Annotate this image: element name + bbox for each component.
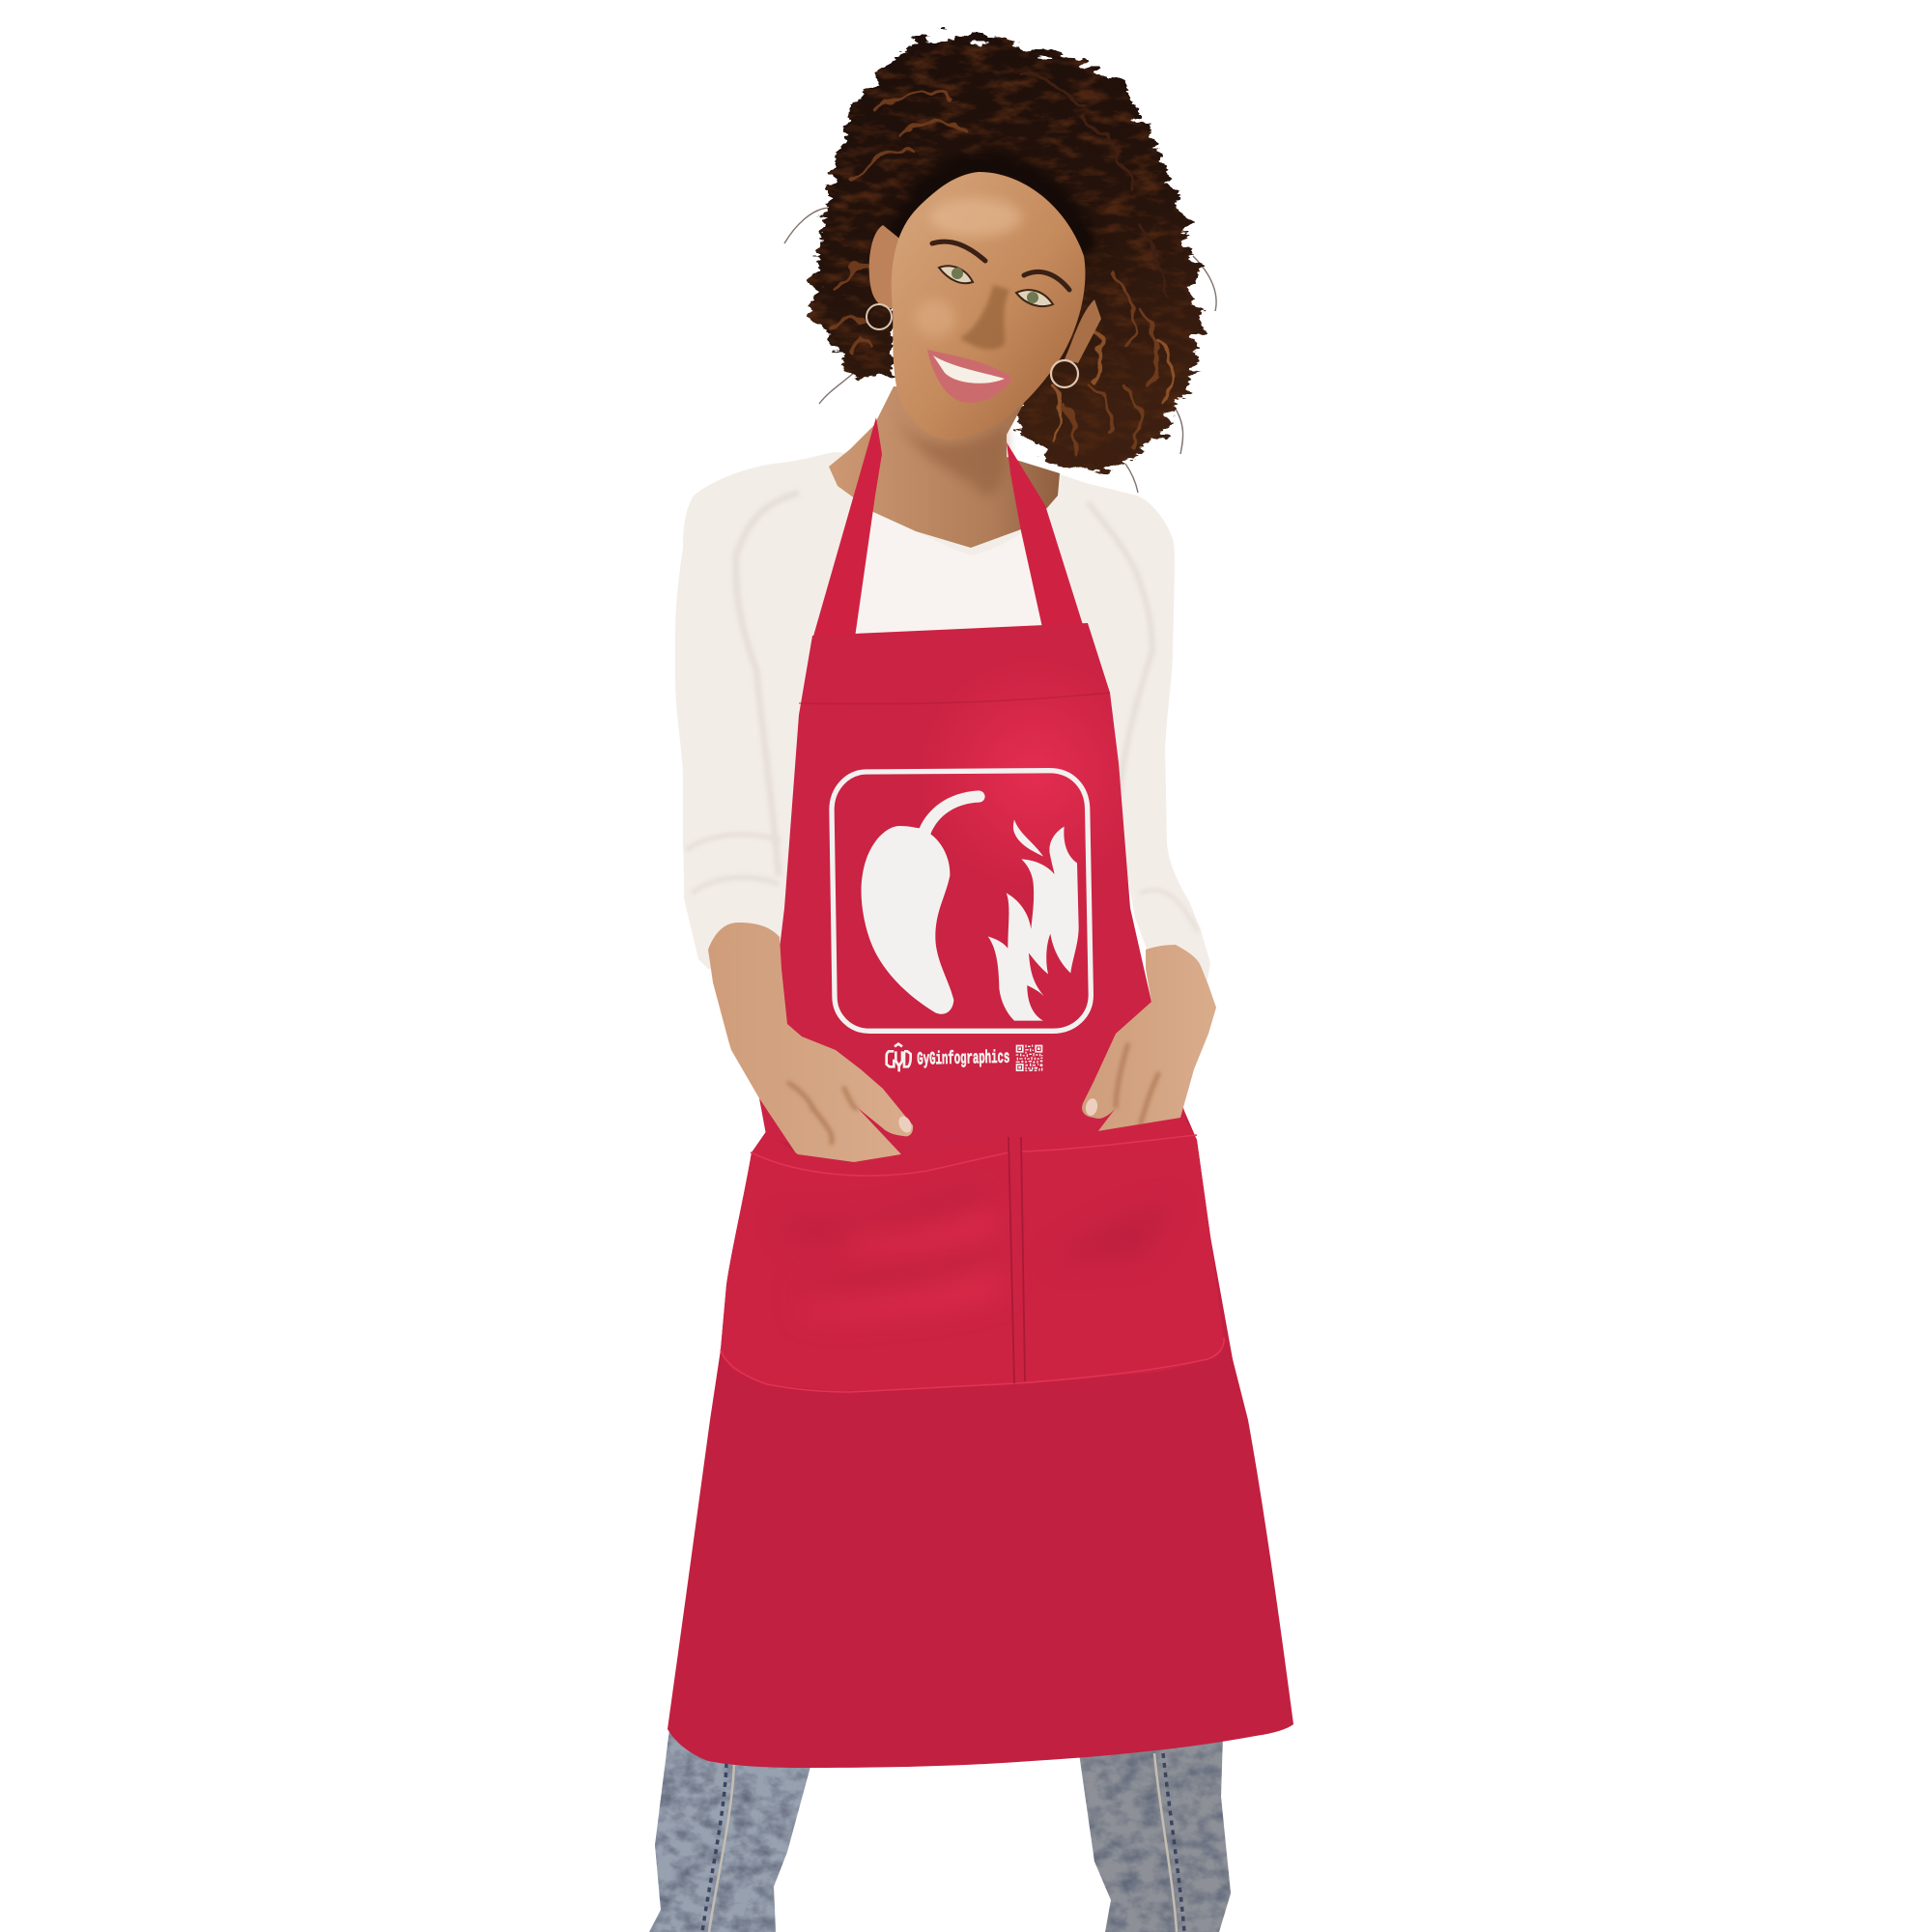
right jeans leg [1079, 1734, 1231, 1932]
right earring [1051, 360, 1078, 387]
nose [960, 285, 1009, 350]
chili pepper [862, 790, 985, 1014]
right thumb nail [1085, 1097, 1098, 1117]
pocket folds [781, 1183, 1174, 1316]
jeans [649, 1729, 1231, 1932]
neck shadow [894, 415, 1006, 497]
QR code [1016, 1045, 1042, 1071]
neck and chest [829, 386, 1060, 548]
stray curls [784, 208, 1216, 493]
shirt neckline [855, 507, 1045, 635]
left hand knuckle shadows [787, 1082, 858, 1145]
hair mass [813, 37, 1199, 471]
apron skirt [668, 1111, 1293, 1768]
cheek highlight [914, 299, 956, 338]
sweater seams and folds [686, 493, 1198, 932]
apron pocket [721, 1118, 1224, 1392]
left ear [869, 225, 903, 308]
left thumb nail [896, 1114, 914, 1135]
right forearm and hand [1082, 945, 1216, 1132]
mouth [927, 350, 1012, 403]
brand logo mark [887, 1044, 911, 1071]
apron straps [812, 417, 1084, 639]
flame small [1013, 819, 1043, 857]
right ear [1065, 299, 1101, 363]
bib stitch [799, 693, 1110, 704]
brand name: GyGinfographics [917, 1047, 1010, 1070]
left earring [867, 304, 892, 329]
flame main [988, 827, 1079, 1021]
right hand knuckle shadows [1116, 1043, 1159, 1125]
icon frame [832, 771, 1091, 1031]
apron bib [759, 623, 1187, 1159]
chili and flame icon [832, 771, 1091, 1071]
pocket stitching [721, 1135, 1224, 1392]
left forearm and hand [708, 923, 914, 1163]
eyes [939, 266, 1053, 306]
sweater [675, 452, 1210, 985]
apron [668, 417, 1293, 1768]
hair [784, 37, 1216, 493]
hair curls [831, 72, 1171, 454]
bib light patch [778, 623, 1150, 1005]
eyebrows [932, 242, 1069, 290]
hairline shadow [894, 164, 1090, 261]
forehead highlight [929, 198, 1022, 237]
face [892, 172, 1085, 440]
left jeans leg [649, 1729, 811, 1932]
